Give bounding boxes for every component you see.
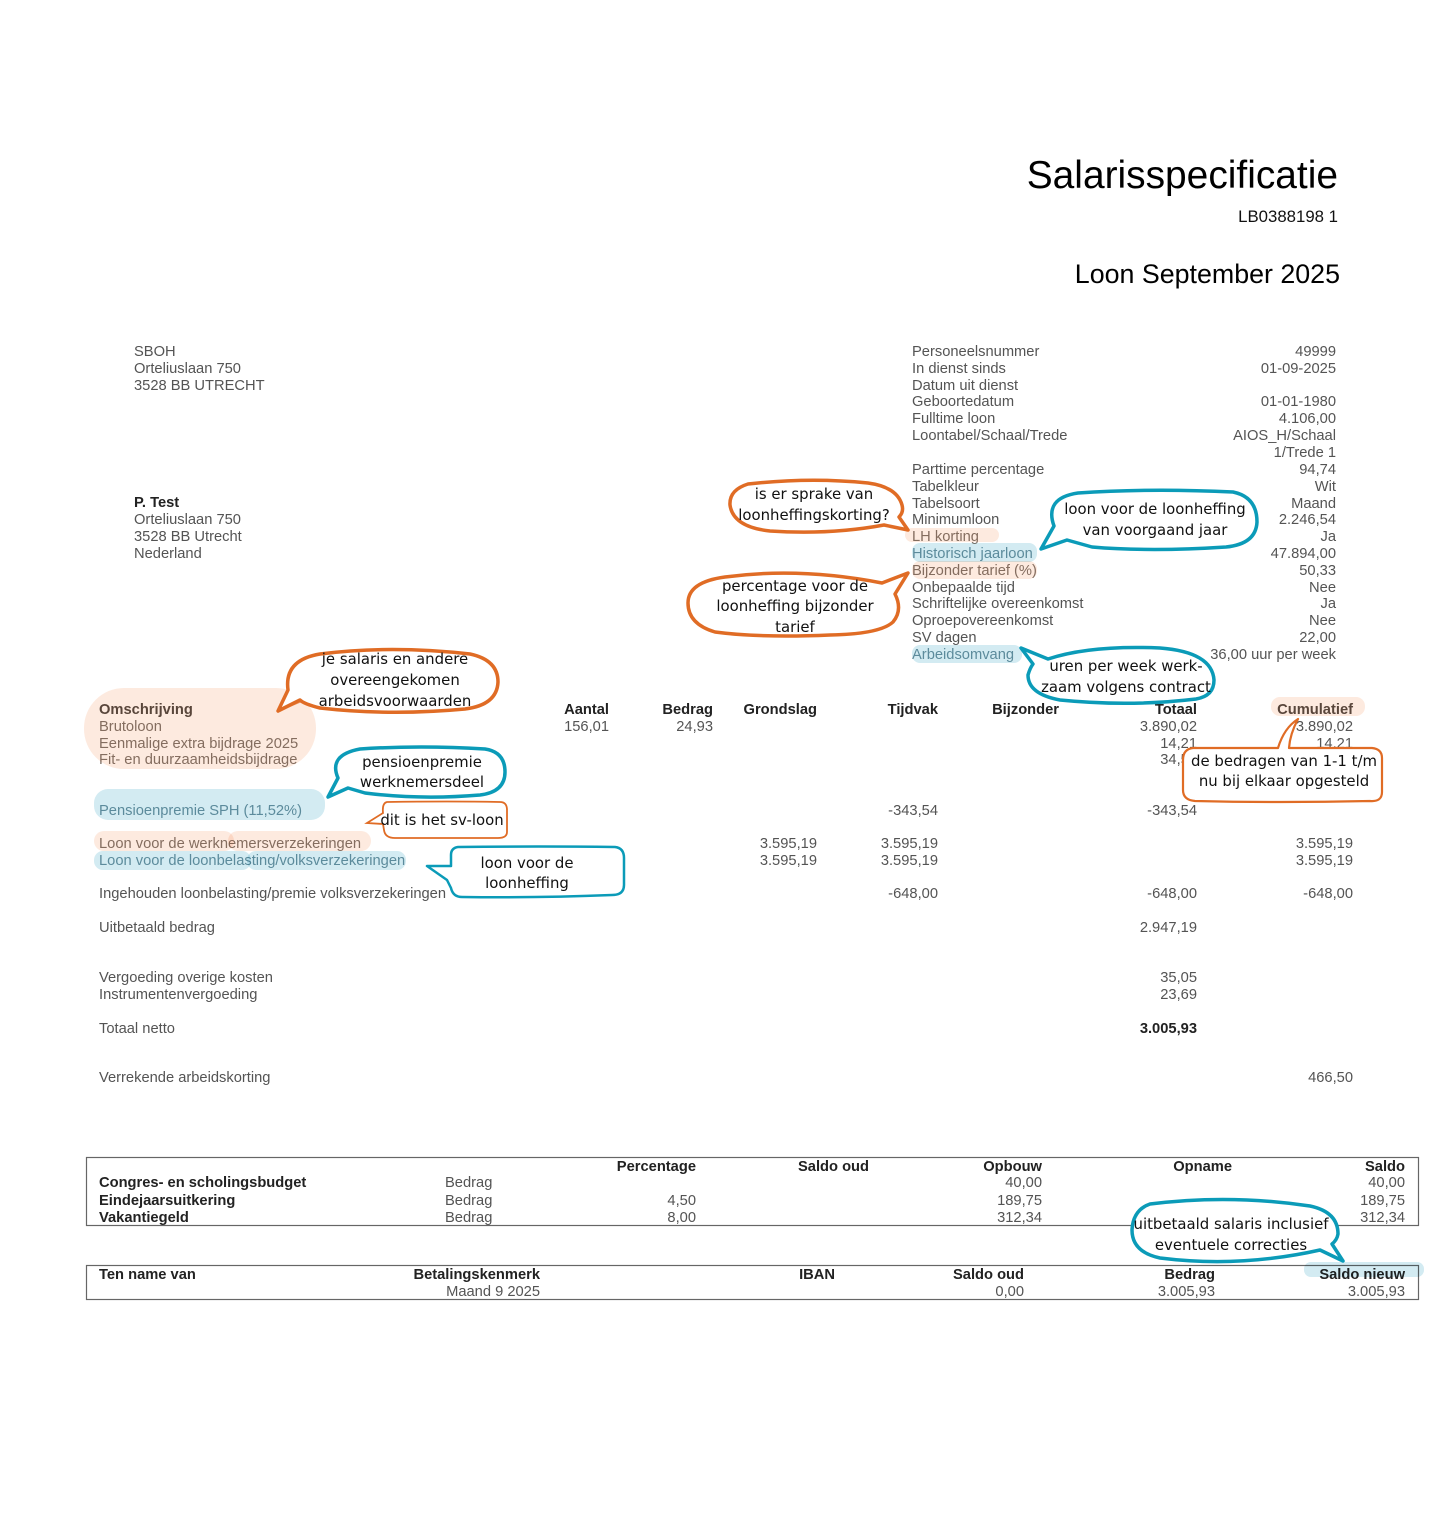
savings table: 189,75 [1360,1193,1405,1209]
employee details: 47.894,00 [1271,546,1336,562]
salary table: Loon voor de werknemersverzekeringen [99,836,361,852]
callout: loon voor de loonheffing [427,846,624,897]
callout: cumulatief: de bedragen van 1-1 t/m [1191,752,1377,770]
salary table: 14,21 [1160,736,1197,752]
payment table: Bedrag [1164,1267,1215,1283]
employee details: Minimumloon [912,512,999,528]
payment table: Saldo nieuw [1319,1267,1406,1283]
salary table: Eenmalige extra bijdrage 2025 [99,736,298,752]
salary table: Vergoeding overige kosten [99,970,273,986]
payment table: Ten name van [99,1267,196,1283]
employee address: Nederland [134,546,202,562]
employee details: Personeelsnummer [912,344,1039,360]
employee details: Tabelsoort [912,496,980,512]
employee details: Historisch jaarloon [912,546,1033,562]
employee details: 01-01-1980 [1261,394,1336,410]
salary table: 3.595,19 [1296,836,1353,852]
savings table: Bedrag [445,1175,492,1191]
employee details: 4.106,00 [1279,411,1336,427]
employee address [134,495,242,562]
employee details: 1/Trede 1 [1274,445,1336,461]
title [1027,154,1340,289]
savings table: 4,50 [667,1193,696,1209]
salary table: 23,69 [1160,987,1197,1003]
salary table: 3.595,19 [760,853,817,869]
callout: loon voor de loonheffing: loonheffing [485,874,569,892]
callout: loon voor de loonheffing: loon voor de [480,854,574,872]
salary table: -648,00 [1303,886,1353,902]
title: LB0388198 1 [1238,207,1338,226]
title: Loon September 2025 [1075,259,1340,289]
payment table: Saldo oud [953,1267,1024,1283]
salary table: 3.595,19 [881,836,938,852]
employee details: Maand [1291,496,1336,512]
employer address [134,344,265,394]
employee details: 01-09-2025 [1261,361,1336,377]
callout: loonheffingskorting: loonheffingskorting? [738,506,890,524]
payment table: Betalingskenmerk [413,1267,541,1283]
salary table: 466,50 [1308,1070,1353,1086]
salary table: Uitbetaald bedrag [99,920,215,936]
salary table: 34,50 [1160,752,1197,768]
callout: arbeidsomvang: zaam volgens contract [1041,678,1211,696]
callout: cumulatief: nu bij elkaar opgesteld [1199,772,1369,790]
savings table: Opbouw [983,1159,1043,1175]
employee address: P. Test [134,495,179,511]
salary table: Ingehouden loonbelasting/premie volksverzekeringen [99,886,446,902]
salary table: Omschrijving [99,702,193,718]
employee details: Oproepovereenkomst [912,613,1053,629]
salary table: Bedrag [662,702,713,718]
employee details: Tabelkleur [912,479,979,495]
callout: arbeidsomvang [1021,647,1214,703]
salary table: Fit- en duurzaamheidsbijdrage [99,752,297,768]
salary table: Grondslag [744,702,817,718]
title: Salarisspecificatie [1027,154,1338,197]
callout: bijzonder tarief: percentage voor de [722,577,868,595]
salary table: Totaal [1155,702,1197,718]
payment table [86,1266,1418,1300]
salary table: Brutoloon [99,719,162,735]
savings table: Percentage [617,1159,696,1175]
salary table: 2.947,19 [1140,920,1197,936]
salary table: 34,50 [1316,752,1353,768]
employee details: SV dagen [912,630,977,646]
payment table: 3.005,93 [1348,1284,1405,1300]
savings table: Saldo [1365,1159,1405,1175]
callout: bijzonder tarief: loonheffing bijzonder [716,597,874,615]
salary table [99,702,1353,1086]
employee details: Loontabel/Schaal/Trede [912,428,1067,444]
savings table: 40,00 [1368,1175,1405,1191]
salary table: Aantal [564,702,609,718]
payment table: Maand 9 2025 [446,1284,540,1300]
callout: pensioenpremie: pensioenpremie [362,753,482,771]
employee details: Nee [1309,580,1336,596]
salary table: 3.005,93 [1140,1021,1197,1037]
salary table: 14,21 [1316,736,1353,752]
employee details: AIOS_H/Schaal [1233,428,1336,444]
employer address: Orteliuslaan 750 [134,361,241,377]
callout: bijzonder tarief [688,573,908,636]
employee details: Onbepaalde tijd [912,580,1015,596]
employee details: Ja [1320,529,1337,545]
salary table: 3.595,19 [1296,853,1353,869]
salary table: Totaal netto [99,1021,175,1037]
savings table: Opname [1173,1159,1232,1175]
employee details: Wit [1315,479,1336,495]
salary table: 3.890,02 [1296,719,1353,735]
employee details [912,344,1337,663]
salary table: Instrumentenvergoeding [99,987,257,1003]
salary table: -343,54 [888,803,938,819]
callout: sv-loon [367,802,507,838]
employee details: Ja [1320,596,1337,612]
employee address: Orteliuslaan 750 [134,512,241,528]
callout: historisch jaarloon: loon voor de loonheffing [1064,500,1246,518]
callout: pensioenpremie: werknemersdeel [360,773,484,791]
employee details: 36,00 uur per week [1210,647,1337,663]
callout: cumulatief [1183,719,1382,802]
callout: historisch jaarloon [1041,490,1257,550]
highlights over text [84,528,1424,1277]
savings table [86,1158,1418,1226]
employee details: LH korting [912,529,979,545]
callout: arbeidsomvang: uren per week werk- [1049,657,1203,675]
employer address: 3528 BB UTRECHT [134,378,265,394]
employee details: 2.246,54 [1279,512,1336,528]
salary table: -648,00 [888,886,938,902]
employer address: SBOH [134,344,176,360]
salary table: 24,93 [676,719,713,735]
callout: loonheffingskorting [730,480,908,532]
payment table: 3.005,93 [1158,1284,1215,1300]
savings table: 40,00 [1005,1175,1042,1191]
callout: pensioenpremie [328,747,505,797]
employee details: 22,00 [1299,630,1336,646]
savings table: Saldo oud [798,1159,869,1175]
savings table: Bedrag [445,1193,492,1209]
employee details: Parttime percentage [912,462,1044,478]
callout: saldo nieuw: eventuele correcties [1155,1236,1307,1254]
employee details: In dienst sinds [912,361,1006,377]
salary table: Pensioenpremie SPH (11,52%) [99,803,302,819]
salary table: Bijzonder [992,702,1059,718]
salary table: Loon voor de loonbelasting/volksverzekeringen [99,853,405,869]
salary table: Cumulatief [1277,702,1353,718]
salary table: 3.595,19 [881,853,938,869]
employee details: Datum uit dienst [912,378,1018,394]
employee details: Geboortedatum [912,394,1014,410]
savings table: 189,75 [997,1193,1042,1209]
callout: loonheffingskorting: is er sprake van [755,485,873,503]
employee details: Arbeidsomvang [912,647,1014,663]
callout: saldo nieuw: uitbetaald salaris inclusief [1134,1215,1329,1233]
employee details: 49999 [1295,344,1336,360]
callout: omschrijving: arbeidsvoorwaarden [319,692,471,710]
salary table: -343,54 [1147,803,1197,819]
callout: saldo nieuw [1132,1199,1343,1262]
employee details: Fulltime loon [912,411,995,427]
payment table: IBAN [799,1267,835,1283]
employee details: Bijzonder tarief (%) [912,563,1037,579]
employee details: Nee [1309,613,1336,629]
savings table: Vakantiegeld [99,1210,189,1226]
callout: historisch jaarloon: van voorgaand jaar [1083,521,1228,539]
callout: sv-loon: dit is het sv-loon [380,811,504,829]
savings table: Eindejaarsuitkering [99,1193,235,1209]
callout: omschrijving: overeengekomen [330,671,460,689]
savings table: 312,34 [997,1210,1042,1226]
savings table: 8,00 [667,1210,696,1226]
callout: bijzonder tarief: tarief [775,618,816,636]
savings table: Congres- en scholingsbudget [99,1175,306,1191]
salary table: 3.890,02 [1140,719,1197,735]
employee details: 50,33 [1299,563,1336,579]
employee address: 3528 BB Utrecht [134,529,242,545]
salary table: Verrekende arbeidskorting [99,1070,270,1086]
employee details: 94,74 [1299,462,1336,478]
savings table: 312,34 [1360,1210,1405,1226]
salary table: 3.595,19 [760,836,817,852]
salary table: 35,05 [1160,970,1197,986]
callout: omschrijving [278,650,498,712]
payment table: 0,00 [995,1284,1024,1300]
callout: omschrijving: je salaris en andere [321,650,468,668]
salary table: Tijdvak [888,702,939,718]
employee details: Schriftelijke overeenkomst [912,596,1083,612]
savings table: Bedrag [445,1210,492,1226]
salary table: -648,00 [1147,886,1197,902]
salary table: 156,01 [564,719,609,735]
